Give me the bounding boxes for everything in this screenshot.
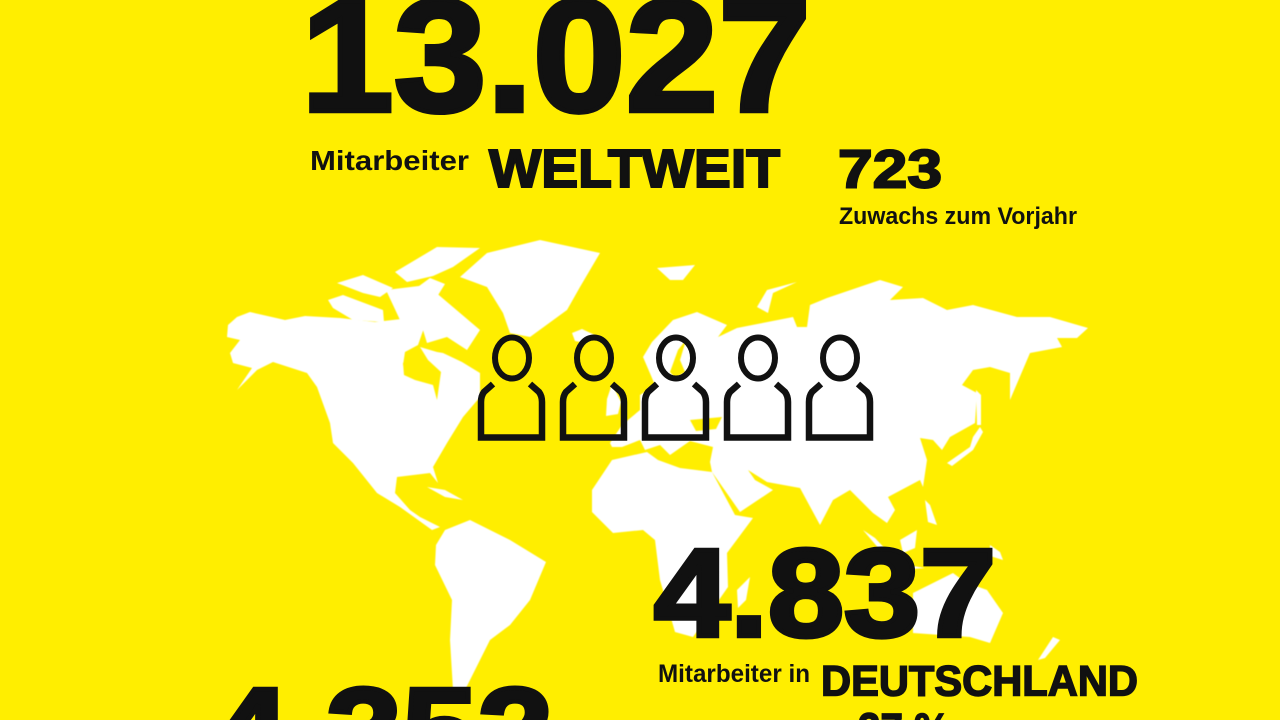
island: New Zealand [1038,637,1060,660]
seas: Black Sea and Baltic [670,340,722,431]
Germany number: 4.837 [654,524,996,663]
island: Iceland [572,329,597,343]
continent: North America [227,312,480,530]
continent: Australia [913,573,1003,643]
island: Madagascar [737,577,750,608]
continent: Africa [592,452,753,637]
label: Mitarbeiter in: Mitarbeiter in [658,660,810,688]
island: Cuba and Caribbean [427,487,463,500]
Hudson Bay [403,347,441,400]
islands: Britain, Japan, Sakhalin, Svalbard, Novaya Zemlya [606,265,983,466]
icon: person 2 [563,338,624,438]
heading: WELTWEIT: WELTWEIT [489,139,780,199]
icon: person 3 [645,338,706,438]
island: Greenland [460,240,600,337]
people icons [481,338,870,438]
label: growth: Zuwachs zum Vorjahr [839,203,1077,230]
label: Mitarbeiter: Mitarbeiter [310,145,469,176]
continent: Eurasia [610,280,1088,525]
icon: person 5 [809,338,870,438]
icon: person 4 [727,338,788,438]
continent: South America [435,520,546,690]
growth number: 723 [838,140,942,200]
world map [227,240,1088,690]
heading: DEUTSCHLAND: DEUTSCHLAND [821,658,1138,706]
icon: person 1 [481,338,542,438]
islands: Indonesia and Philippines [863,500,1003,570]
islands: Canadian Arctic [328,247,480,350]
